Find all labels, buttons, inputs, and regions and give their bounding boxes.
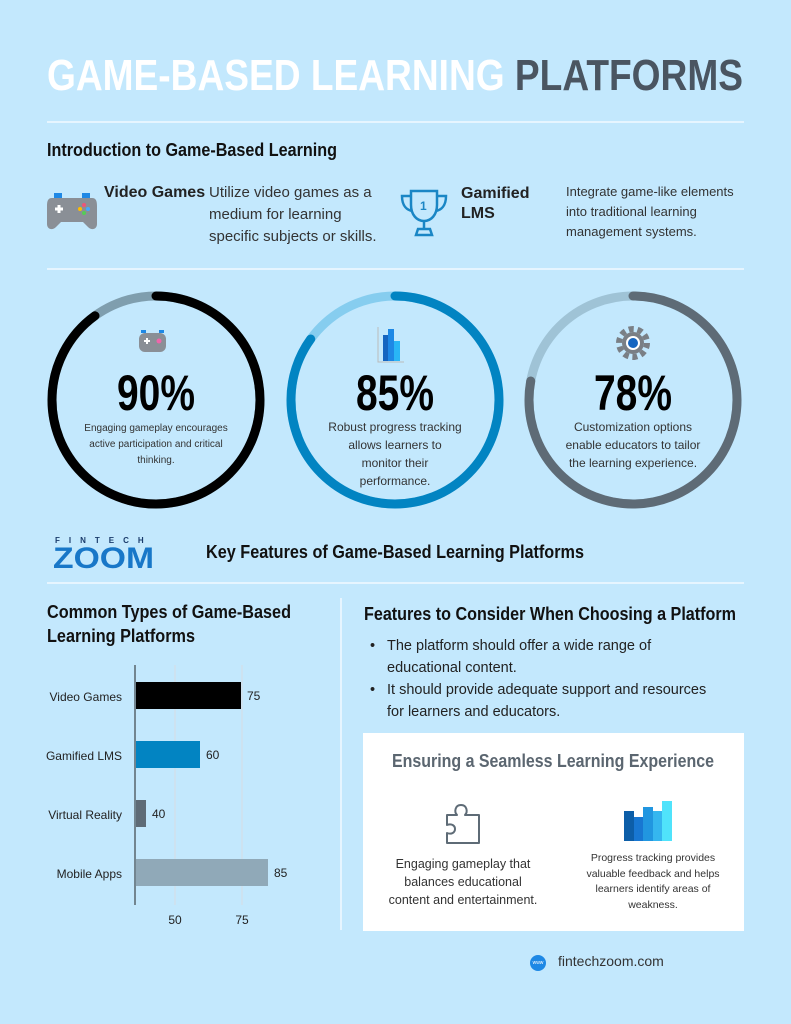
donut: 85%: allows learners to	[348, 438, 442, 452]
donut: 85%: performance.	[360, 474, 430, 488]
donut: 90%: active participation and critical	[89, 439, 223, 450]
donut: 90%: thinking.	[137, 455, 175, 466]
label: video games: Video Games	[104, 184, 205, 201]
heading: common types: Learning Platforms	[47, 626, 195, 646]
text: gameplay: Engaging gameplay that balances educational content and entertainment.	[389, 857, 537, 907]
text: gamified desc: into traditional learning	[566, 204, 697, 219]
heading: features to consider: Features to Consider When Choosing a Platform	[364, 604, 736, 624]
text: video games desc: medium for learning	[209, 206, 342, 223]
donut: 78%: Customization options	[574, 420, 692, 434]
chart: bar chart: 75	[247, 689, 261, 703]
donut: 78%: 78%	[594, 365, 672, 421]
chart: bar chart: 85	[274, 866, 288, 880]
heading: common types	[47, 602, 291, 646]
chart: bar chart: 75	[235, 913, 249, 927]
text: gamified desc	[566, 184, 734, 239]
list: features: •	[370, 682, 375, 698]
list: features: educational content.	[387, 660, 517, 676]
donut: 85%: 85%	[356, 365, 434, 421]
label: gamified lms: Gamified	[461, 185, 529, 202]
heading: common types: Common Types of Game-Based	[47, 602, 291, 622]
icon: puzzle	[446, 804, 480, 844]
donut: 78%: the learning experience.	[569, 456, 697, 470]
logo: fintech zoom: FINTECH	[55, 536, 153, 545]
footer: website: www	[533, 960, 543, 966]
title: GAME-BASED LEARNING PLATFORMS	[47, 51, 743, 100]
text: gamified desc: Integrate game-like elements	[566, 184, 734, 199]
list: features: The platform should offer a wide range of	[387, 638, 651, 654]
chart: bar chart: 60	[206, 748, 220, 762]
panel: seamless experience	[363, 733, 744, 931]
label: gamified lms: LMS	[461, 205, 495, 222]
heading: introduction: Introduction to Game-Based Learning	[47, 140, 337, 160]
chart: bar chart: Mobile Apps	[57, 867, 122, 881]
text: progress: Progress tracking provides valuable feedback and helps learners identify areas of weakness.	[586, 852, 720, 910]
list: features: It should provide adequate support and resources	[387, 682, 706, 698]
icon: gamepad	[47, 193, 97, 230]
donut: 85%: Robust progress tracking	[328, 420, 462, 434]
chart: bar chart	[46, 665, 288, 927]
donut: 85%: monitor their	[362, 456, 428, 470]
heading: key features: Key Features of Game-Based Learning Platforms	[206, 542, 584, 562]
logo: fintech zoom	[53, 536, 154, 571]
text: gamified desc: management systems.	[566, 224, 697, 239]
donut: 90%: Engaging gameplay encourages	[84, 423, 228, 434]
chart: bar chart: Video Games	[50, 690, 122, 704]
chart: bar chart: 40	[152, 807, 166, 821]
donut: 85%	[291, 296, 499, 504]
text: video games desc: specific subjects or skills.	[209, 228, 377, 245]
icon: trophy	[400, 190, 448, 236]
list: features: •	[370, 638, 375, 654]
footer: website: fintechzoom.com	[558, 953, 664, 969]
text: video games desc	[209, 184, 377, 245]
donut: 78%: enable educators to tailor	[566, 438, 700, 452]
chart: bar chart: Virtual Reality	[48, 808, 122, 822]
chart: donuts	[48, 292, 742, 508]
list: features: for learners and educators.	[387, 704, 560, 720]
label: gamified lms	[461, 185, 529, 222]
chart: bar chart: 50	[168, 913, 182, 927]
icon: bars	[624, 801, 672, 841]
text: video games desc: Utilize video games as a	[209, 184, 372, 201]
chart: bar chart: Gamified LMS	[46, 749, 122, 763]
donut: 78%	[529, 296, 737, 504]
donut: 90%	[52, 296, 260, 504]
icon: trophy: 1	[420, 199, 427, 213]
list: features	[370, 638, 706, 720]
donut: 90%: 90%	[117, 365, 195, 421]
